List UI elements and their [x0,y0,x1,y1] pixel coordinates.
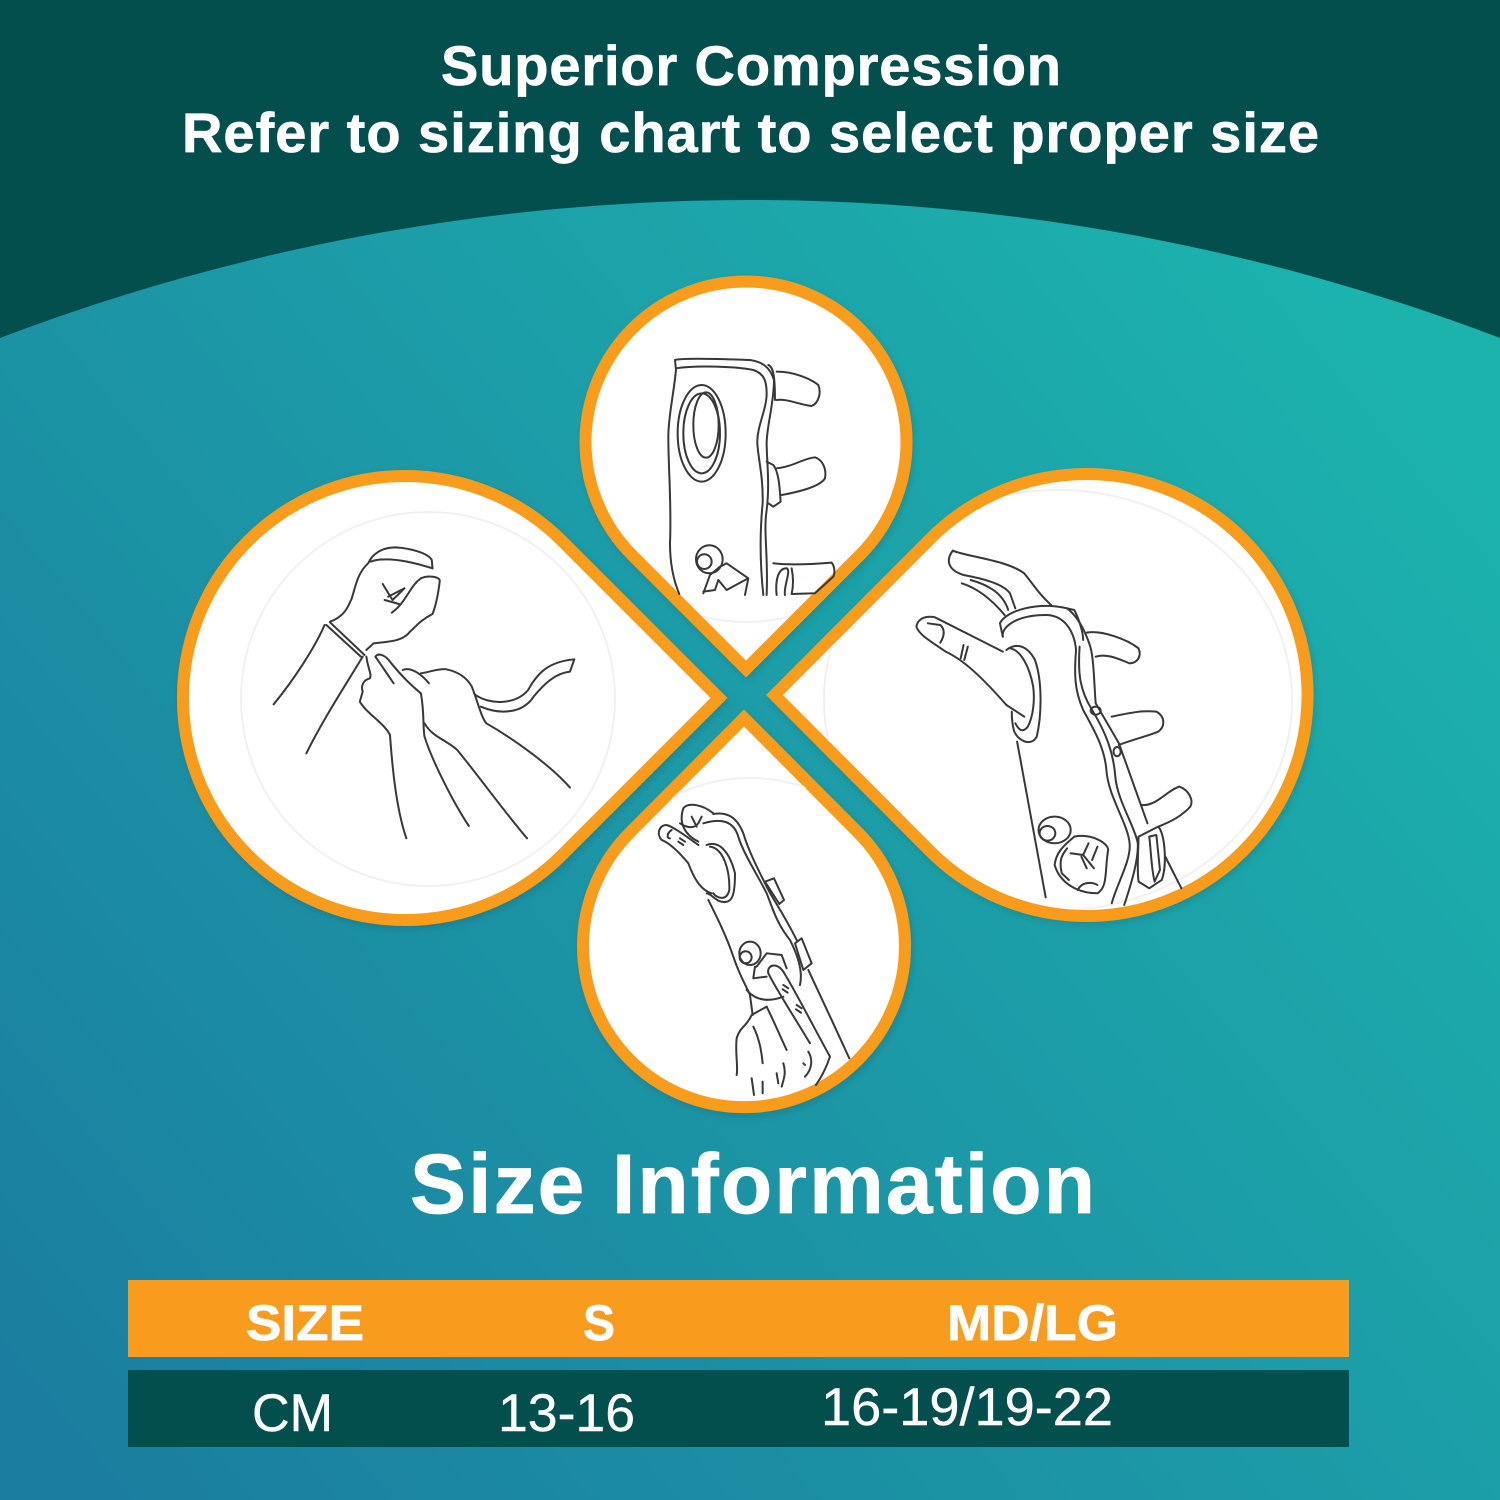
title: Refer to sizing chart to select proper size [182,101,1319,164]
table header row: MD/LG [947,1295,1118,1351]
table values row [128,1370,1349,1447]
title [182,34,1319,164]
panel: left teardrop, tightening the strap [183,476,719,920]
heading: Size Information: Size Information [410,1137,1095,1231]
panel: top teardrop, brace with fingers [566,262,926,669]
table header row [128,1280,1349,1357]
header band with arc [0,0,1500,338]
icon: hands pulling strap on wrist [274,547,574,838]
icon: finger pressing brace fastener [659,805,849,1095]
panel: right teardrop, brace on hand [774,474,1308,916]
size table [128,1280,1349,1447]
icon: open wrist brace [668,359,834,595]
table values row: CM [252,1384,333,1443]
icon: brace worn on hand, thumb out [916,551,1191,905]
table values row: 16-19/19-22 [821,1378,1113,1437]
table header row: S [583,1295,615,1351]
table header row: SIZE [246,1295,364,1351]
panel: bottom teardrop, pressing the brace [580,718,920,1118]
title: Superior Compression [441,34,1061,97]
table values row: 13-16 [498,1384,635,1443]
